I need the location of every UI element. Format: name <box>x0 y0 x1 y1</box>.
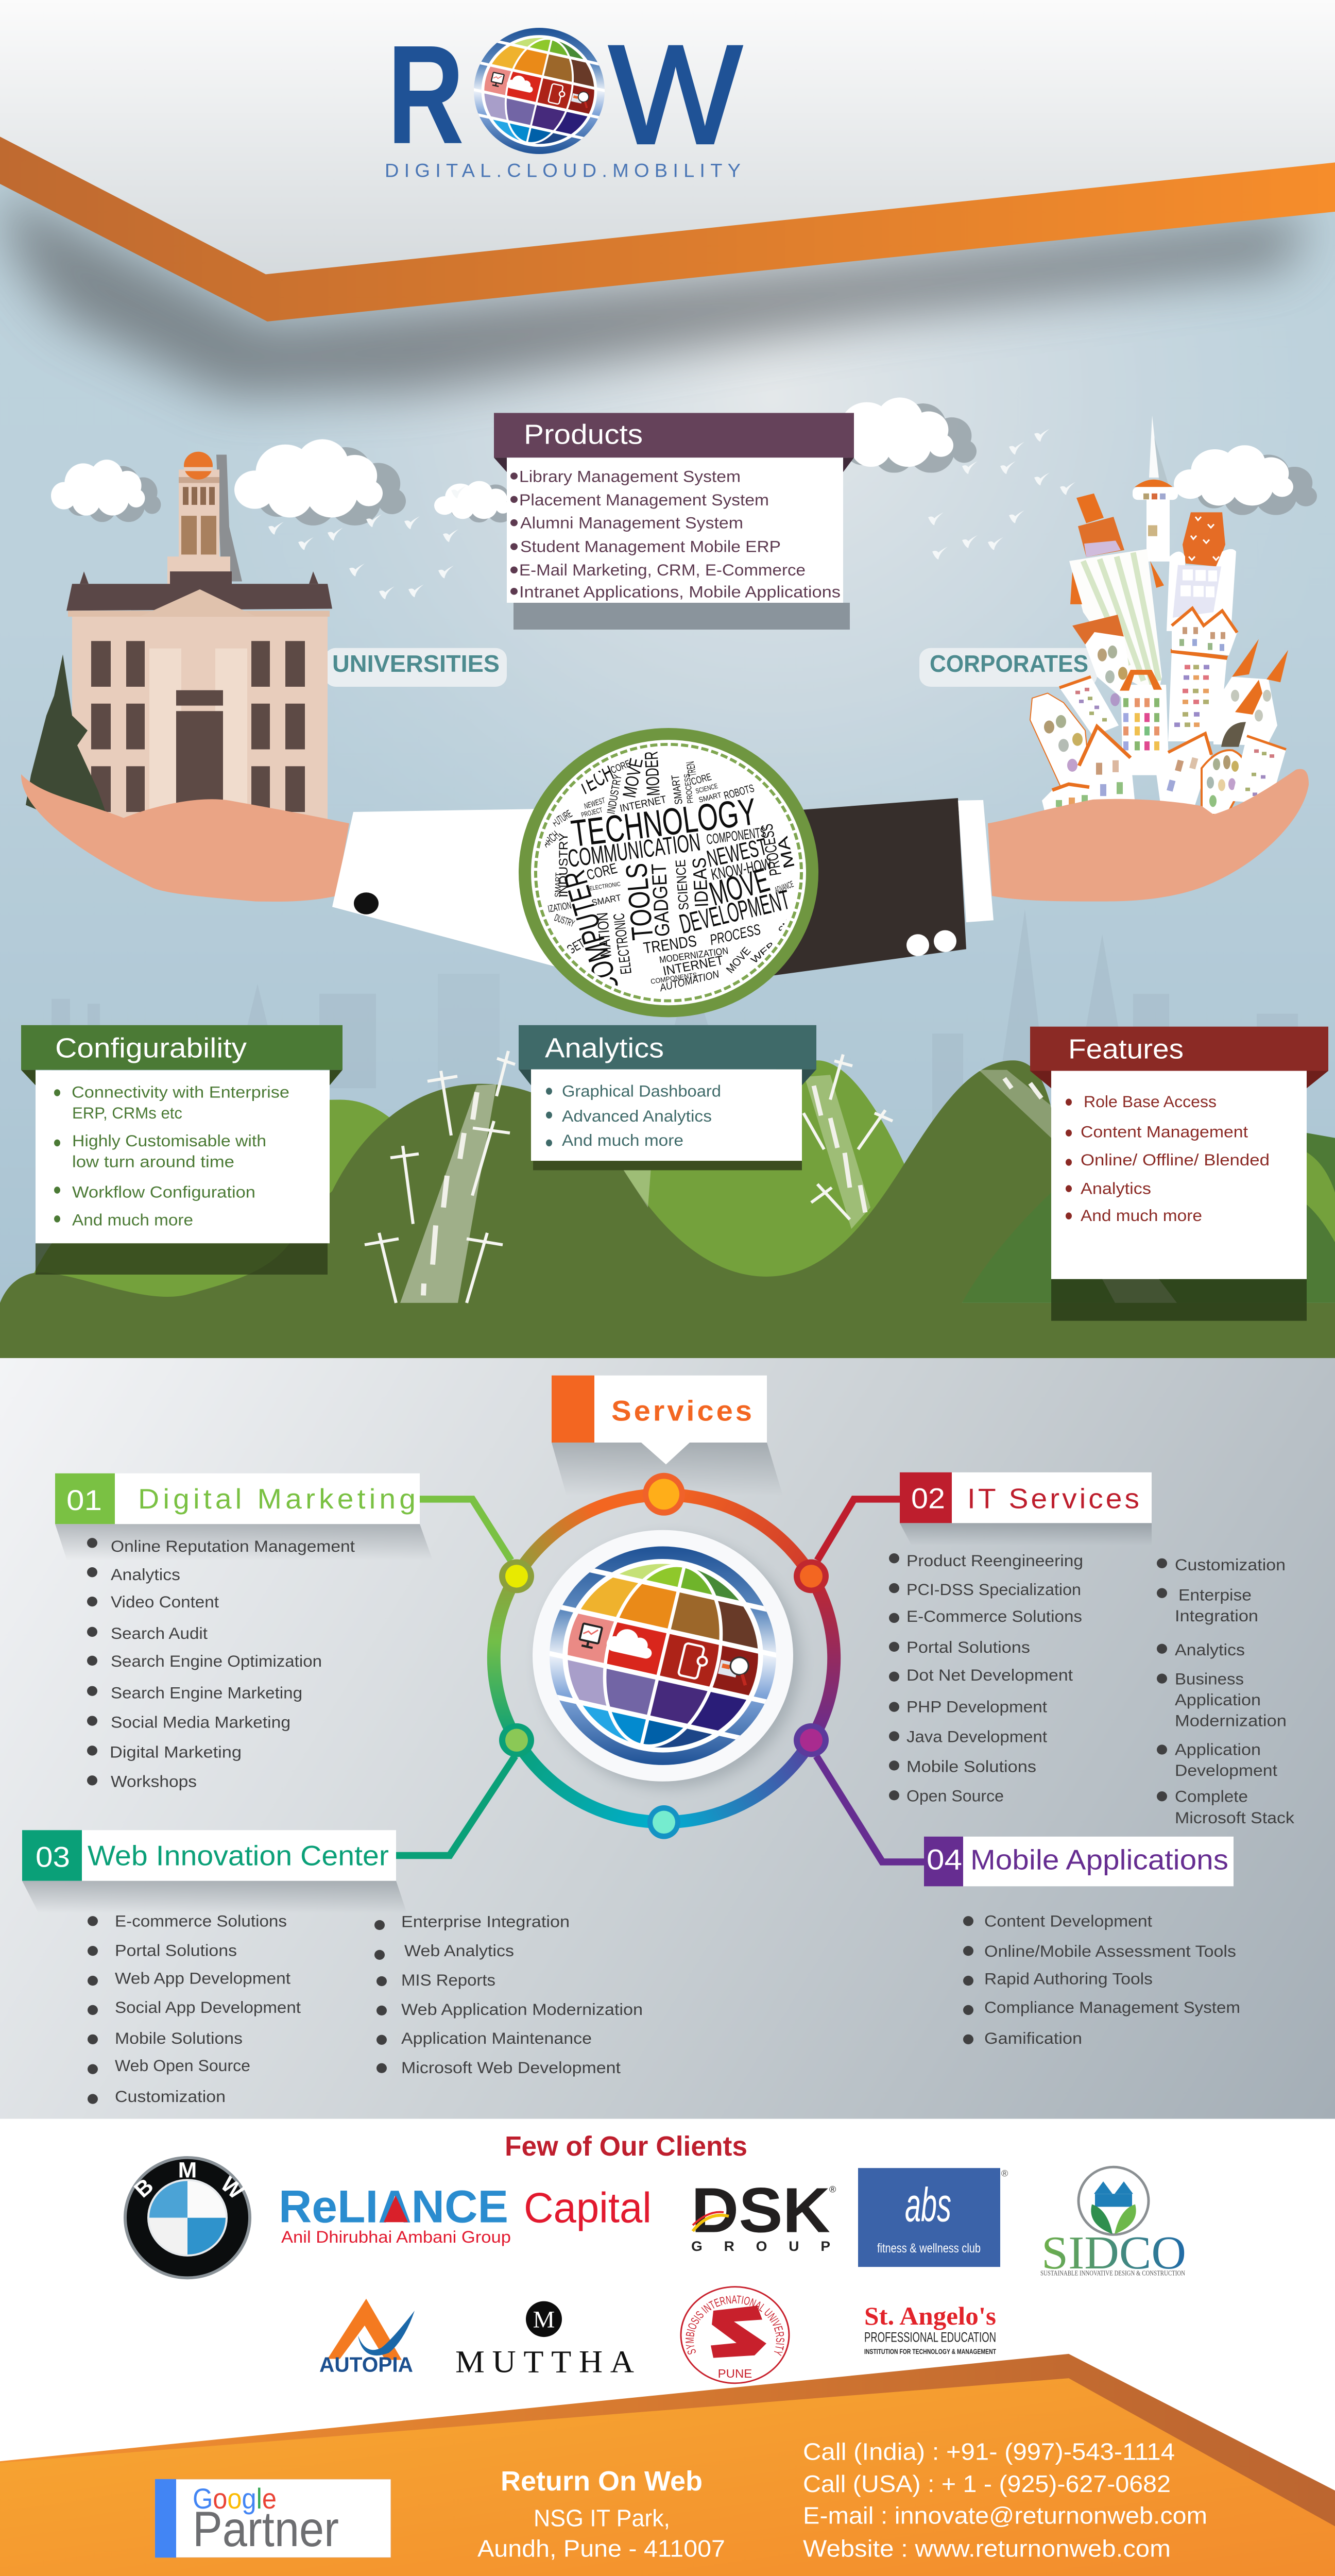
word cloud: INTERNET <box>662 953 725 978</box>
client: st angelos: St. Angelo's <box>864 2302 996 2331</box>
client: abs fitness: abs <box>905 2178 951 2231</box>
label: web innovation center: Web Innovation Center <box>88 1840 389 1872</box>
products list: Intranet Applications, Mobile Applications <box>519 583 841 601</box>
list: it services column 1: Dot Net Development <box>906 1666 1073 1684</box>
colour ring <box>494 1495 834 1822</box>
client: DSK group: ® <box>829 2184 836 2194</box>
products list: Alumni Management System <box>520 514 743 532</box>
client: muttha: MUTTHA <box>455 2344 634 2379</box>
client: autopia: AUTOPIA <box>319 2353 413 2376</box>
client: BMW: M <box>178 2158 197 2182</box>
footer contact: Website : www.returnonweb.com <box>803 2535 1171 2562</box>
list: it services column 1: E-Commerce Solutions <box>906 1607 1082 1625</box>
list: it services column 1: Mobile Solutions <box>906 1757 1036 1775</box>
label: digital marketing: 01 <box>66 1484 102 1517</box>
list: mobile applications: Compliance Management System <box>984 1998 1240 2016</box>
client: DSK group: GROUP <box>691 2239 830 2254</box>
list: digital marketing: Online Reputation Management <box>111 1537 355 1555</box>
word cloud: ROBOTS <box>722 782 756 802</box>
list: web innovation column 1 <box>88 1912 301 2106</box>
connector: digital marketing <box>420 1499 511 1561</box>
client: abs fitness: ® <box>1001 2168 1008 2178</box>
logo: ROW <box>385 15 744 181</box>
panel: configurability <box>21 1025 343 1275</box>
background: sky glow <box>0 149 1335 994</box>
list: mobile applications: Online/Mobile Assessment Tools <box>984 1942 1236 1960</box>
word cloud: SCIENCE <box>695 782 718 795</box>
list: web innovation column 2: Application Maintenance <box>401 2029 592 2047</box>
label: it services <box>900 1472 1152 1546</box>
right slanted block <box>1231 736 1286 804</box>
white tower with lilac frame <box>1167 549 1236 631</box>
list: digital marketing <box>87 1537 355 1790</box>
services heading tag: Services <box>611 1395 752 1427</box>
gabled house top right <box>1172 608 1237 655</box>
products list: Student Management Mobile ERP <box>520 537 781 555</box>
list: it services column 2: Application <box>1175 1740 1261 1759</box>
list: mobile applications: Content Development <box>984 1912 1152 1930</box>
features heading: Features <box>1068 1033 1184 1064</box>
list: web innovation column 1: Web Open Source <box>115 2057 250 2075</box>
small house bottom left <box>1042 784 1097 815</box>
list: digital marketing: Search Engine Marketing <box>111 1684 302 1702</box>
word cloud: MOVE <box>619 756 647 799</box>
list: mobile applications: Gamification <box>984 2029 1082 2047</box>
footer contact <box>803 2438 1207 2562</box>
list: mobile applications <box>963 1912 1240 2047</box>
list: it services column 1: Open Source <box>906 1787 1004 1805</box>
word cloud: COMPUTER <box>557 867 626 997</box>
client: symbiosis <box>680 2286 790 2384</box>
client: st angelos: PROFESSIONAL EDUCATION <box>864 2329 996 2345</box>
label: web innovation center: 03 <box>36 1841 70 1873</box>
list: web innovation column 2: Web Application Modernization <box>401 2001 643 2019</box>
products list: Library Management System <box>519 467 741 485</box>
word cloud: SMART <box>776 902 808 936</box>
client: symbiosis: SYMBIOSIS INTERNATIONAL UNIVERSITY <box>686 2296 785 2357</box>
ribbon shadow <box>0 189 1308 398</box>
logo globe <box>459 21 620 161</box>
client: BMW: B <box>129 2174 159 2202</box>
configurability list: And much more <box>72 1211 193 1229</box>
configurability list: Workflow Configuration <box>72 1183 255 1201</box>
client: SIDCO <box>1040 2167 1186 2279</box>
hand: left <box>21 774 349 902</box>
list: digital marketing: Workshops <box>111 1772 197 1790</box>
footer contact: Call (USA) : + 1 - (925)-627-0682 <box>803 2470 1171 2497</box>
client: st angelos: INSTITUTION FOR TECHNOLOGY & MANAGEMENT <box>864 2348 996 2355</box>
cuff: dark sleeve <box>766 798 994 976</box>
list: web innovation column 1: Web App Development <box>115 1969 290 1987</box>
word cloud: NEWEST <box>704 833 769 872</box>
ring nodes <box>499 1473 829 1839</box>
list: it services column 2: Development <box>1175 1761 1277 1780</box>
power poles <box>365 1051 893 1303</box>
list: it services column 2: Application <box>1175 1691 1261 1709</box>
clients heading: Few of Our Clients <box>505 2130 747 2162</box>
footer contact: Call (India) : +91- (997)-543-1114 <box>803 2438 1175 2465</box>
list: web innovation column 2 <box>374 1912 643 2077</box>
client: reliance capital: Anil Dhirubhai Ambani Group <box>281 2228 511 2247</box>
client: reliance capital: Capital <box>524 2184 652 2231</box>
products list: E-Mail Marketing, CRM, E-Commerce <box>519 561 806 579</box>
list: it services column 2 <box>1157 1555 1295 1827</box>
orange ribbon <box>0 137 1335 321</box>
label: corporates: CORPORATES <box>930 650 1088 677</box>
list: digital marketing: Search Audit <box>111 1624 208 1642</box>
hills <box>0 1060 1335 1358</box>
central globe <box>524 1530 802 1788</box>
client: muttha <box>455 2301 634 2379</box>
list: it services column 1: Portal Solutions <box>906 1638 1030 1656</box>
analytics heading: Analytics <box>545 1032 664 1063</box>
configurability list: Highly Customisable with <box>72 1132 266 1150</box>
background: faint city silhouette <box>52 909 1298 1138</box>
client: reliance capital <box>279 2181 652 2247</box>
word cloud: TREN <box>683 760 699 777</box>
google partner badge <box>155 2479 391 2557</box>
word cloud: INTERNET <box>619 793 668 815</box>
list: it services column 2: Customization <box>1175 1555 1286 1574</box>
word cloud: ARCH <box>539 828 562 850</box>
features list: Content Management <box>1081 1123 1248 1141</box>
section background: services <box>0 1358 1335 2119</box>
list: it services column 2: Modernization <box>1175 1711 1287 1730</box>
client: abs fitness: fitness & wellness club <box>877 2242 981 2256</box>
client: SIDCO: SIDCO <box>1041 2227 1186 2279</box>
products list: Placement Management System <box>519 490 769 509</box>
label: mobile applications: Mobile Applications <box>970 1843 1228 1875</box>
list: it services column 2: Business <box>1175 1670 1244 1688</box>
connector: it services <box>817 1499 900 1561</box>
chimney tower <box>1183 512 1225 567</box>
word cloud: AUTOMATION <box>658 968 721 994</box>
label: it services: 02 <box>911 1482 945 1515</box>
word cloud: PROCESS <box>758 823 785 877</box>
label: digital marketing: Digital Marketing <box>138 1483 416 1515</box>
services heading tag <box>552 1376 783 1496</box>
birds <box>268 429 1075 599</box>
footer band: dark <box>0 2354 1335 2576</box>
section background: clients <box>0 2119 1335 2576</box>
features list <box>1066 1092 1270 1225</box>
word cloud: CORE <box>690 771 713 788</box>
word cloud: COMMUNICATION <box>566 828 702 873</box>
list: digital marketing: Digital Marketing <box>110 1743 242 1761</box>
arched house <box>1202 750 1245 815</box>
list: it services column 2: Analytics <box>1175 1640 1245 1659</box>
word cloud: SMART <box>554 872 563 897</box>
word cloud: GET <box>564 936 588 957</box>
centre block <box>1120 670 1169 775</box>
client: st angelos <box>864 2302 996 2355</box>
connector: web innovation center <box>396 1756 515 1855</box>
word cloud: KNOW-HOW <box>710 855 773 884</box>
word cloud: TECHNOLOGY <box>569 790 759 855</box>
analytics list: And much more <box>562 1131 683 1149</box>
word cloud: COMPONENTS <box>706 824 767 848</box>
word cloud: PROCESS <box>708 921 762 948</box>
word cloud: INDUSTRY <box>557 833 570 897</box>
configurability list: Connectivity with Enterprise <box>72 1083 289 1101</box>
label: web innovation center <box>22 1830 407 1913</box>
list: it services column 2: Enterpise <box>1178 1586 1252 1604</box>
curved gable house <box>1030 693 1093 811</box>
lower right house <box>1156 734 1211 815</box>
list: web innovation column 2: Enterprise Integration <box>401 1912 570 1930</box>
word cloud: CORE <box>585 860 619 884</box>
list: web innovation column 1: Mobile Solutions <box>115 2029 243 2047</box>
list: digital marketing: Video Content <box>111 1593 219 1611</box>
list: it services column 1 <box>889 1552 1083 1805</box>
client: BMW: W <box>216 2172 248 2204</box>
cuff: white sleeve <box>332 809 561 969</box>
configurability list: ERP, CRMs etc <box>72 1104 182 1122</box>
hand: right <box>988 769 1309 902</box>
features list: Online/ Offline/ Blended <box>1081 1150 1270 1169</box>
panel: features <box>1030 1027 1328 1321</box>
word cloud: MODERNIZATION <box>659 945 729 965</box>
list: web innovation column 2: Microsoft Web Development <box>401 2058 621 2077</box>
road: right hill <box>617 1070 1051 1229</box>
word cloud: SCIENCE <box>673 859 692 911</box>
list: it services column 1: PHP Development <box>906 1698 1047 1716</box>
word cloud: SMART <box>669 774 685 805</box>
client: symbiosis: PUNE <box>718 2367 752 2380</box>
label: universities <box>324 648 507 687</box>
footer address <box>477 2465 725 2562</box>
client: reliance capital: ReLIANCE <box>279 2181 508 2232</box>
logo letter W: W <box>609 15 744 173</box>
clouds <box>51 398 1317 526</box>
list: web innovation column 2: Web Analytics <box>404 1942 514 1960</box>
orange stack <box>1076 494 1124 557</box>
client: BMW <box>124 2156 251 2279</box>
panel: technology sphere <box>519 728 818 1017</box>
list: web innovation column 1: Social App Development <box>115 1998 301 2016</box>
list: web innovation column 2: MIS Reports <box>401 1971 495 1989</box>
word cloud: MOVE <box>705 861 774 913</box>
label: mobile applications <box>924 1837 1234 1886</box>
products heading: Products <box>524 418 643 450</box>
footer address: Return On Web <box>501 2465 703 2497</box>
client: muttha: M <box>533 2307 555 2333</box>
google partner badge: Google <box>193 2483 277 2515</box>
features list: And much more <box>1081 1206 1202 1225</box>
word cloud: ELECTRONIC <box>589 880 621 892</box>
logo tagline: DIGITAL.CLOUD.MOBILITY <box>385 160 741 181</box>
features list: Role Base Access <box>1084 1092 1217 1111</box>
list: digital marketing: Analytics <box>111 1566 180 1584</box>
label: it services: IT Services <box>967 1482 1139 1514</box>
word cloud: INDUSTRY <box>604 773 624 815</box>
list: web innovation column 1: E-commerce Solutions <box>115 1912 287 1930</box>
word cloud: SMART <box>698 791 723 804</box>
slanted block <box>1059 677 1119 736</box>
word cloud: DUSTRY <box>553 912 576 929</box>
tall windowed block <box>1168 649 1228 741</box>
word cloud: WEB <box>749 940 778 966</box>
label: digital marketing <box>55 1473 433 1561</box>
list: digital marketing: Search Engine Optimization <box>111 1652 322 1670</box>
list: mobile applications: Rapid Authoring Tools <box>984 1970 1153 1988</box>
background: sky <box>0 0 1335 1358</box>
analytics list: Graphical Dashboard <box>562 1082 721 1100</box>
list: it services column 2: Complete <box>1175 1787 1248 1805</box>
list: it services column 1: PCI-DSS Specialization <box>906 1581 1081 1599</box>
analytics list: Advanced Analytics <box>562 1107 712 1125</box>
configurability list: low turn around time <box>72 1153 234 1171</box>
list: it services column 2: Integration <box>1175 1607 1258 1625</box>
word cloud: DEVELOPMENT <box>676 885 793 940</box>
list: it services column 1: Java Development <box>906 1727 1047 1745</box>
word cloud <box>539 751 808 997</box>
list: it services column 1: Product Reengineering <box>906 1552 1083 1570</box>
list: web innovation column 1: Customization <box>115 2087 226 2106</box>
word cloud: PROJECT <box>580 806 604 819</box>
word cloud: ADVANCE <box>773 879 795 895</box>
configurability list <box>54 1083 289 1229</box>
word cloud: CORE <box>609 758 632 776</box>
word cloud: NEWEST <box>583 796 607 811</box>
word cloud: COMPONENTS <box>650 971 697 986</box>
configurability heading: Configurability <box>55 1032 247 1063</box>
client: abs fitness <box>858 2168 1008 2267</box>
features list: Analytics <box>1081 1179 1151 1198</box>
word cloud: MODER <box>641 751 664 796</box>
city of corporates <box>1030 415 1288 815</box>
road: central <box>400 1084 497 1303</box>
client: autopia <box>319 2299 415 2376</box>
spire tower <box>1133 415 1178 562</box>
word cloud: TOOLS <box>620 862 660 941</box>
word cloud: MA <box>774 835 798 870</box>
gable house left <box>1072 615 1128 706</box>
word cloud: TRENDS <box>642 932 698 957</box>
client: DSK group: DSK <box>691 2175 830 2246</box>
label: universities: UNIVERSITIES <box>332 650 500 677</box>
logo letter R: R <box>387 15 464 173</box>
analytics list <box>546 1082 721 1149</box>
word cloud: SMART <box>591 892 622 908</box>
products list <box>510 467 841 601</box>
word cloud: GADGET <box>647 863 674 937</box>
footer panel <box>0 2378 1335 2576</box>
list: digital marketing: Social Media Marketing <box>111 1713 290 1731</box>
tree <box>26 654 107 820</box>
list: web innovation column 1: Portal Solutions <box>115 1941 237 1959</box>
word cloud: ELECTRONIC <box>610 912 635 975</box>
word cloud: IZATION <box>547 900 572 915</box>
castle <box>1213 639 1288 747</box>
label: corporates <box>919 648 1097 687</box>
word cloud: TECH <box>572 759 618 800</box>
label: mobile applications: 04 <box>927 1843 962 1876</box>
top white panel <box>0 0 1335 274</box>
striped building <box>1069 549 1164 696</box>
footer address: NSG IT Park, <box>534 2504 670 2531</box>
panel: products <box>494 413 854 630</box>
panel: analytics <box>519 1025 816 1170</box>
building: university <box>66 452 332 820</box>
list: it services column 2: Microsoft Stack <box>1175 1808 1295 1827</box>
word cloud: MOVE <box>723 944 753 976</box>
word cloud: IDEAS <box>688 857 712 908</box>
lower left house <box>1079 726 1136 815</box>
word cloud: FUTURE <box>550 807 574 829</box>
footer contact: E-mail : innovate@returnonweb.com <box>803 2502 1207 2529</box>
word cloud: MATION <box>594 912 615 958</box>
word cloud: PROCESS <box>683 773 695 804</box>
client: SIDCO: SUSTAINABLE INNOVATIVE DESIGN & CONSTRUCTION <box>1040 2269 1185 2277</box>
google partner badge: Partner <box>193 2501 339 2557</box>
connector: mobile applications <box>816 1756 924 1862</box>
footer address: Aundh, Pune - 411007 <box>477 2535 725 2562</box>
